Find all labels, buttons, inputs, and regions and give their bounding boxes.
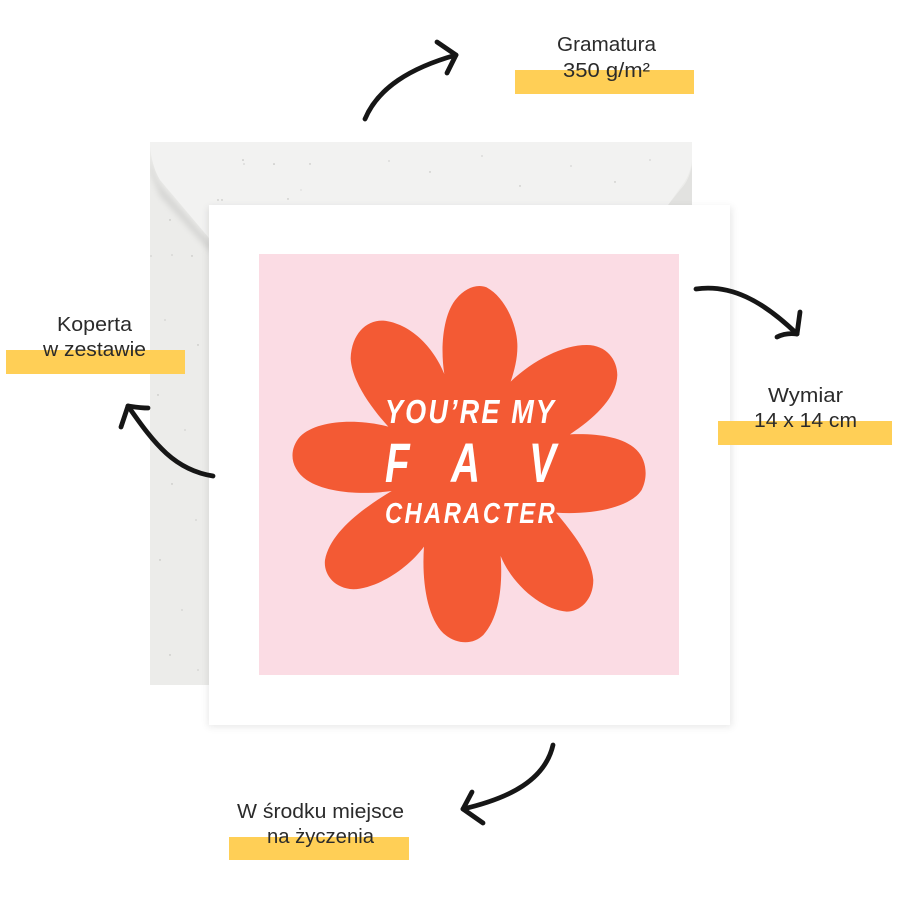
card message: F: [385, 433, 411, 495]
arrow: up to weight: [365, 42, 456, 119]
label: weight: [515, 34, 694, 94]
card message: A: [450, 433, 480, 495]
card message: V: [529, 433, 559, 495]
label: size: 14 x 14 cm: [754, 410, 857, 432]
label: inside: na życzenia: [267, 826, 375, 848]
envelope flap: [150, 142, 692, 238]
card message: CHARACTER: [385, 497, 555, 530]
label: envelope: w zestawie: [42, 339, 146, 361]
label: envelope: [6, 314, 185, 374]
envelope speckles: [150, 155, 651, 671]
card shadow: [208, 207, 732, 727]
pink panel: [259, 254, 679, 675]
label: weight: 350 g/m²: [563, 60, 650, 82]
card message: YOU’RE MY: [385, 395, 556, 431]
arrow: right to size: [696, 288, 800, 337]
label: size: [718, 385, 892, 445]
label: inside: W środku miejsce: [237, 801, 404, 823]
label: weight: Gramatura: [557, 34, 657, 56]
label: size: Wymiar: [768, 385, 843, 407]
label: envelope: Koperta: [57, 314, 133, 336]
envelope: [150, 142, 692, 685]
arrow: left to envelope: [121, 406, 213, 476]
card message: [385, 395, 559, 530]
arrow: down to inside: [463, 745, 553, 823]
label: inside: [229, 801, 409, 860]
card: [209, 205, 730, 725]
flower: [292, 286, 646, 642]
